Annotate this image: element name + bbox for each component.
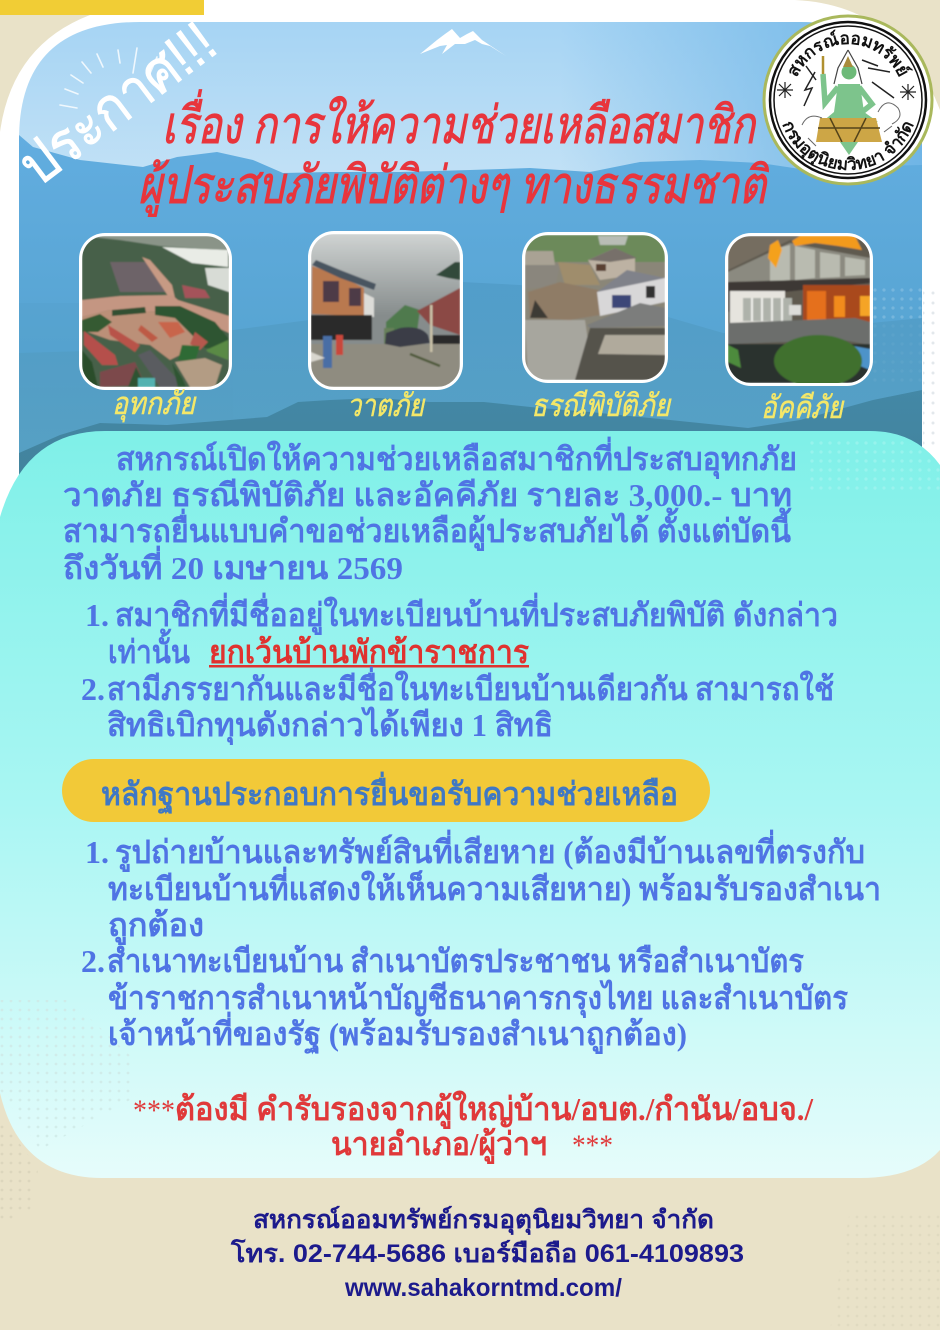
list: conditions: สมาชิกที่มีชื่ออยู่ในทะเบียนบ้านที่ประสบภัยพิบัติ ดังกล่าว	[115, 592, 838, 636]
yellow corner bar	[0, 0, 204, 15]
list: evidence: สำเนาทะเบียนบ้าน สำเนาบัตรประชาชน หรือสำเนาบัตร	[107, 943, 804, 979]
photo: flood	[79, 233, 232, 390]
heading pill: required evidence	[62, 759, 710, 822]
text block: introduction: วาตภัย ธรณีพิบัติภัย และอัคคีภัย รายละ 3,000.- บาท	[63, 477, 792, 513]
icon: cooperative seal: สหกรณ์ออมทรัพย์	[789, 29, 913, 77]
list: evidence	[81, 829, 881, 1055]
footer contact: www.sahakorntmd.com/	[344, 1274, 622, 1302]
list: conditions: สามีภรรยากันและมีชื่อในทะเบียนบ้านเดียวกัน สามารถใช้	[107, 666, 834, 707]
photo caption: earthquake: ธรณีพิบัติภัย	[531, 388, 672, 423]
list: evidence: เจ้าหน้าที่ของรัฐ (พร้อมรับรองสำเนาถูกต้อง)	[108, 1011, 687, 1055]
decorative dots top right	[807, 436, 940, 490]
list: evidence: ทะเบียนบ้านที่แสดงให้เห็นความเสียหาย) พร้อมรับรองสำเนา	[108, 866, 881, 907]
decorative dots right margin	[923, 285, 940, 445]
callout: required certification: นายอำเภอ/ผู้ว่าฯ	[331, 1126, 547, 1165]
footer contact: สหกรณ์ออมทรัพย์กรมอุตุนิยมวิทยา จำกัด	[253, 1205, 714, 1236]
callout: required certification: ต้องมี คำรับรองจากผู้ใหญ่บ้าน/อบต./กำนัน/อบจ./	[175, 1090, 814, 1130]
text block: introduction: ถึงวันที่ 20 เมษายน 2569	[63, 545, 403, 586]
icon: spark lines	[60, 48, 157, 108]
list: evidence: 1.	[85, 834, 109, 870]
list: conditions: สิทธิเบิกทุนดังกล่าวได้เพียง 1 สิทธิ	[107, 706, 553, 746]
title: ผู้ประสบภัยพิบัติต่างๆ ทางธรรมชาติ	[138, 157, 769, 217]
photo caption: storm: วาตภัย	[347, 388, 426, 423]
white backing shape	[0, 0, 940, 1000]
panel: sky and mountains banner	[19, 22, 922, 503]
list: evidence: 2.	[81, 943, 105, 979]
title: เรื่อง การให้ความช่วยเหลือสมาชิก	[162, 89, 757, 155]
heading pill: required evidence: หลักฐานประกอบการยื่นขอรับความช่วยเหลือ	[101, 771, 678, 815]
decorative dots footer	[830, 1210, 940, 1330]
decorative dots lower left	[0, 1120, 38, 1225]
list: conditions: ยกเว้นบ้านพักข้าราชการ	[209, 634, 529, 670]
list: evidence: ข้าราชการสำเนาหน้าบัญชีธนาคารกรุงไทย และสำเนาบัตร	[108, 979, 848, 1019]
list: conditions: เท่านั้น	[108, 628, 190, 670]
heading: announce: ประกาศ!!!	[7, 9, 228, 198]
text block: introduction	[63, 436, 797, 586]
title	[138, 89, 769, 217]
announcement badge	[7, 9, 228, 198]
list: evidence: ถูกต้อง	[108, 907, 204, 946]
photo: storm	[308, 231, 463, 390]
callout: required certification: ***	[572, 1129, 613, 1162]
photo: house fire	[725, 233, 873, 387]
photo caption: flood: อุทกภัย	[112, 386, 197, 423]
list: conditions	[81, 592, 838, 746]
text block: introduction: สามารถยื่นแบบคำขอช่วยเหลือผู้ประสบภัยได้ ตั้งแต่บัดนี้	[63, 507, 792, 552]
list: conditions: 2.	[81, 671, 105, 707]
icon: cooperative seal: กรมอุตุนิยมวิทยา จำกัด	[782, 122, 914, 170]
panel: main content	[0, 431, 940, 1178]
photo: earthquake	[522, 232, 668, 383]
text block: introduction: สหกรณ์เปิดให้ความช่วยเหลือสมาชิกที่ประสบอุทกภัย	[116, 436, 797, 480]
decorative dots left	[0, 1000, 135, 1150]
list: conditions: 1.	[85, 597, 109, 633]
icon: white mountain logo	[420, 29, 506, 56]
footer contact	[230, 1205, 744, 1302]
callout: required certification	[133, 1090, 814, 1165]
footer contact: โทร. 02-744-5686 เบอร์มือถือ 061-4109893	[230, 1238, 744, 1268]
callout: required certification: ***	[133, 1094, 175, 1127]
photo caption: fire: อัคคีภัย	[761, 390, 845, 425]
icon: cooperative seal	[762, 14, 934, 186]
list: evidence: รูปถ่ายบ้านและทรัพย์สินที่เสียหาย (ต้องมีบ้านเลขที่ตรงกับ	[115, 829, 865, 873]
